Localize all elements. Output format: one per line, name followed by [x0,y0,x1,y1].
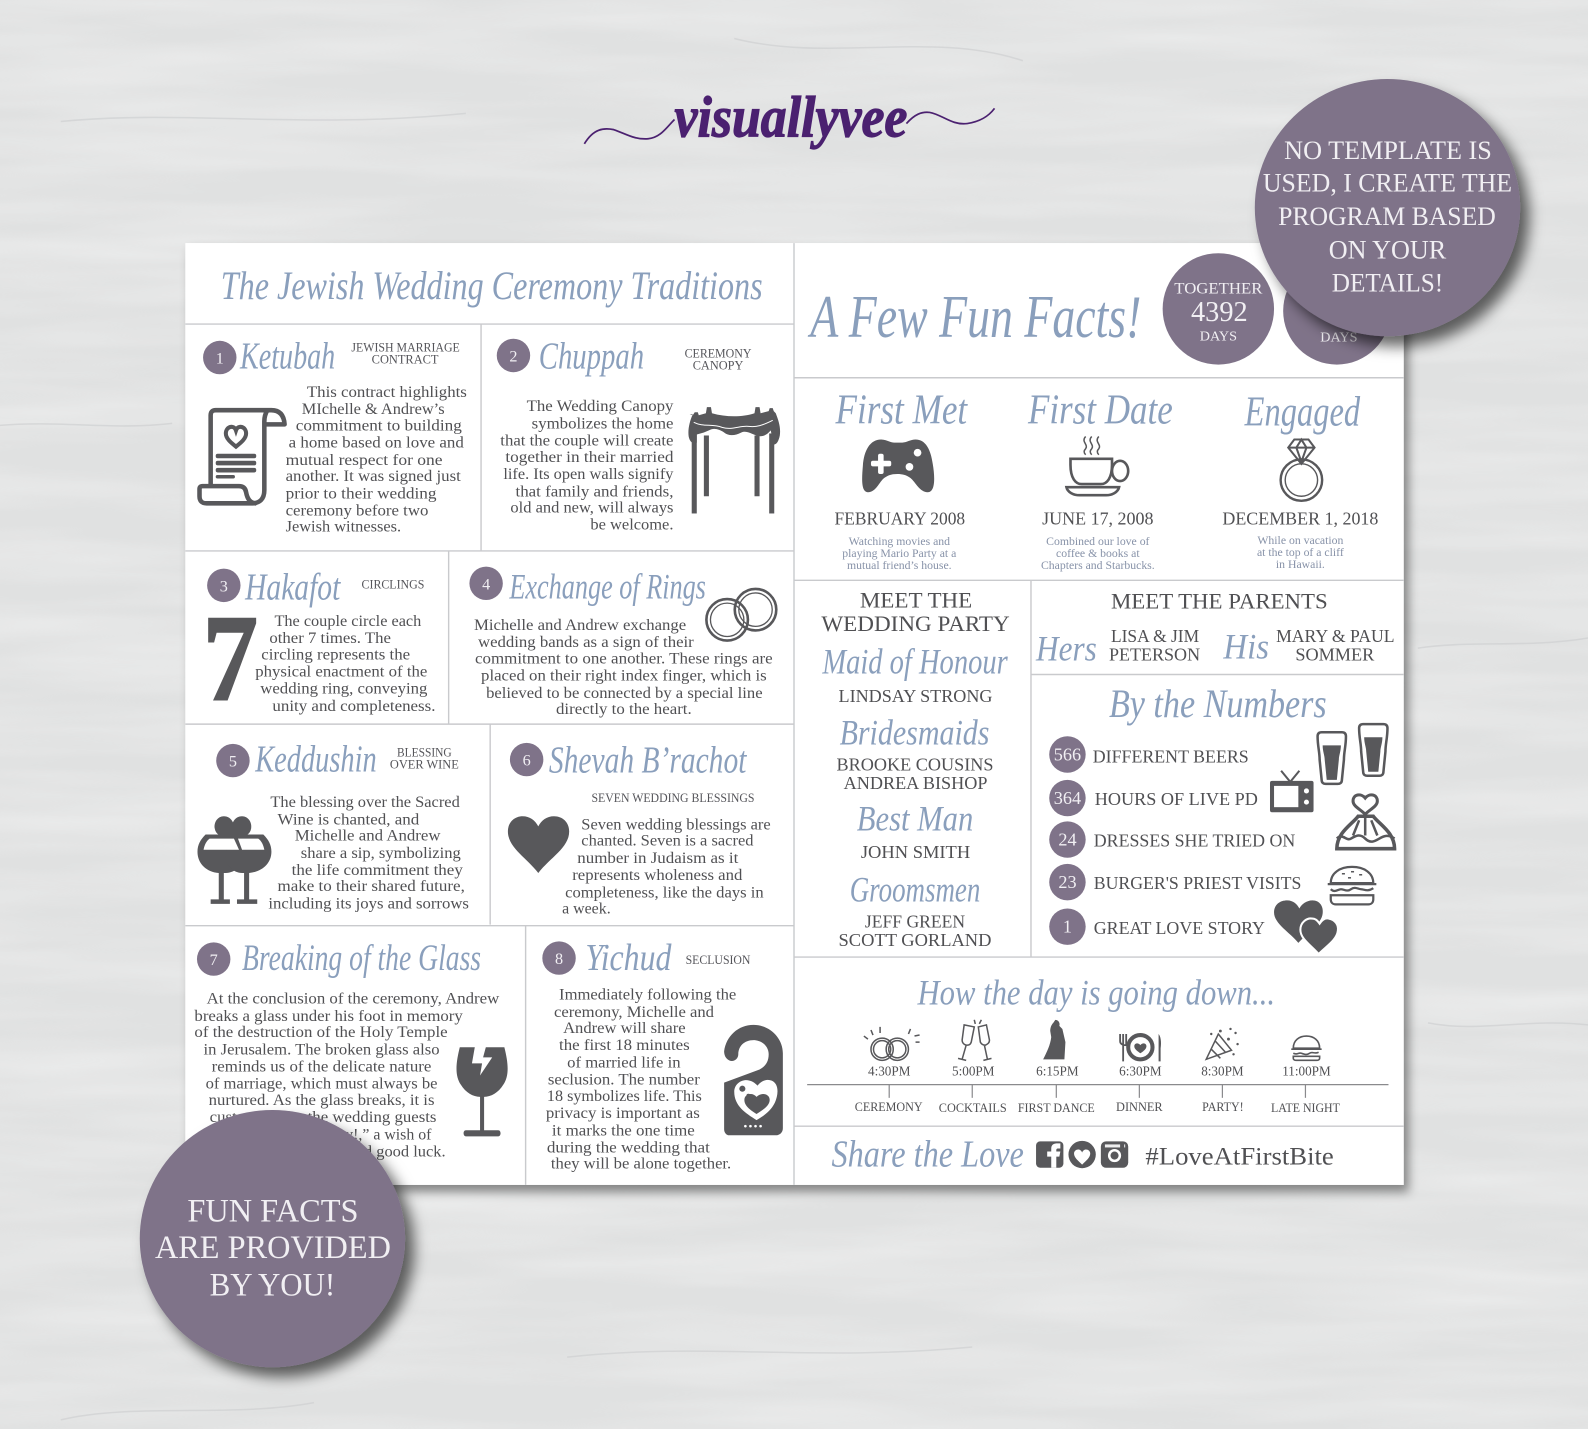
row: 23 burgers: 23 [1058,872,1077,892]
heading: MEET THE PARENTS [1111,589,1328,614]
hers: PETERSON [1109,644,1200,664]
body text: the life commitment they [292,862,463,879]
his: His [1223,626,1269,666]
engaged column: at the top of a cliff [1257,546,1344,559]
body text: seclusion. The number [548,1072,701,1089]
body text: Seven wedding blessings are [581,816,771,833]
body text: This contract highlights [307,384,467,401]
body text: it marks the one time [552,1122,695,1139]
callout: fun facts are provided by you: FUN FACTS [187,1193,359,1229]
bridesmaids: BROOKE COUSINS [837,755,994,775]
icon: facebook [1036,1141,1063,1168]
panel: share the love [831,1134,1334,1176]
subtitle: JEWISH MARRIAGE [351,340,460,354]
body text: chanted. Seven is a sacred [581,833,754,850]
his [1223,626,1395,666]
body text: customary for the wedding guests [210,1109,436,1126]
timeline labels: COCKTAILS [939,1101,1007,1115]
row: 23 burgers: BURGER'S PRIEST VISITS [1094,873,1301,893]
icon: coffee cup [1066,436,1128,495]
callout: no template is used [1255,79,1520,336]
icon: bride and groom silhouette [1043,1020,1065,1059]
first date column: coffee & books at [1056,547,1140,560]
second days badge [1283,257,1391,365]
his: SOMMER [1295,644,1374,664]
timeline times: 6:15PM [1036,1064,1079,1079]
days together badge: DAYS [1200,328,1237,344]
body text: together in their married [505,449,674,466]
heading: WEDDING PARTY [821,611,1010,636]
body text: make to their shared future, [277,878,465,895]
logo: visuallyvee: visuallyvee [674,85,907,150]
his: MARY & PAUL [1276,626,1395,646]
subtitle [685,347,751,373]
first date column: Combined our love of [1046,535,1150,548]
white program card [185,243,1404,1185]
row: 1 love story [1049,908,1265,945]
timeline labels: FIRST DANCE [1018,1101,1095,1115]
callout: no template is used: PROGRAM BASED [1278,202,1496,231]
body text [194,991,500,1161]
Yichud heading: Yichud [585,937,672,979]
body text: 18 symbolizes life. This [547,1088,702,1105]
first date column: JUNE 17, 2008 [1042,509,1154,529]
panel: 2 Chuppah [497,336,780,534]
body text: during the wedding that [547,1140,711,1157]
number badge 7: 7 [210,951,218,969]
number badge 3: 3 [220,577,228,595]
row: 566 beers: DIFFERENT BEERS [1093,747,1249,767]
row: 1 love story: GREAT LOVE STORY [1094,918,1265,938]
subtitle: SECLUSION [686,953,750,967]
body text: Jewish witnesses. [286,519,401,536]
body text: physical enactment of the [255,664,427,681]
panel: by the numbers [1049,681,1395,954]
row: 24 dresses: DRESSES SHE TRIED ON [1094,831,1296,851]
Keddushin heading: Keddushin [254,739,377,781]
number badge 2 [497,339,530,372]
callout: fun facts are provided by you [140,1110,405,1367]
icon: wine glasses and heart [197,816,271,904]
body text: of the destruction of the Holy Temple [194,1024,448,1041]
callout: fun facts are provided by you: ARE PROVIDED [155,1230,391,1266]
callout: no template is used: ON YOUR [1329,235,1447,264]
icon: party popper [1206,1028,1239,1059]
panel: milestones [835,386,1379,572]
body text: to shout “Mazel Tov!,” a wish of [224,1126,432,1143]
icon: champagne flutes [958,1020,991,1060]
body text: in Jerusalem. The broken glass also [204,1041,440,1058]
bridesmaids: ANDREA BISHOP [844,773,988,793]
body text: a home based on love and [289,435,464,452]
subtitle: OVER WINE [390,758,459,772]
maid of honour [822,641,1008,706]
panel: meet the wedding party [821,588,1010,950]
timeline times: 8:30PM [1201,1064,1244,1079]
number badge 8 [542,941,576,975]
timeline labels: PARTY! [1202,1100,1244,1114]
body text: unity and completeness. [272,698,435,715]
body text: The blessing over the Sacred [270,794,460,811]
body text: number in Judaism as it [577,850,739,867]
panel: 1 Ketubah [200,336,467,536]
panel: 3 Hakafot [203,567,435,727]
subtitle [351,340,460,367]
body text: commitment to one another. These rings are [475,650,773,667]
panel: meet the parents [1035,589,1395,668]
icon: heart [508,816,569,873]
row: 364 live pd: 364 [1054,788,1081,808]
body text [268,794,469,912]
body text: MIchelle & Andrew’s [302,401,445,418]
second days badge: DAYS [1320,329,1357,345]
callout: no template is used: NO TEMPLATE IS [1284,136,1492,165]
body text [562,816,771,918]
body text: privacy is important as [546,1105,700,1122]
body text: circling represents the [261,646,410,663]
Shevah B'rachot heading: Shevah B’rachot [549,740,747,782]
body text: of marriage, which must always be [206,1076,438,1093]
body text: Immediately following the [559,987,736,1004]
body text: directly to the heart. [556,701,692,718]
icon: diamond ring [1281,440,1322,501]
row: 364 live pd: HOURS OF LIVE PD [1095,789,1258,809]
body text: other 7 times. The [269,630,391,647]
days together badge: TOGETHER [1174,280,1263,298]
subtitle: SEVEN WEDDING BLESSINGS [591,791,755,805]
number badge 8: 8 [555,950,563,968]
groomsmen: Groomsmen [850,869,980,909]
body text: old and new, will always [510,499,673,516]
body text: Michelle and Andrew exchange [474,617,686,634]
first date column: Chapters and Starbucks. [1041,559,1155,572]
row: 364 live pd [1049,780,1258,816]
first met column [835,386,968,572]
row: 24 dresses: 24 [1058,830,1077,850]
icon: wedding dress [1337,795,1395,849]
body text: the first 18 minutes [559,1037,690,1054]
first met column: playing Mario Party at a [842,547,957,560]
bridesmaids [837,712,994,793]
body text: mutual respect for one [286,452,443,469]
days together badge [1163,253,1274,365]
icon: chuppah canopy [688,407,780,513]
callout: no template is used: USED, I CREATE THE [1263,168,1512,197]
body text: life. Its open walls signify [503,466,674,483]
engaged column: While on vacation [1257,534,1344,547]
icon: instagram [1101,1141,1128,1168]
hers: LISA & JIM [1111,626,1199,646]
days together badge: 4392 [1191,297,1248,328]
body text: At the conclusion of the ceremony, Andrew [207,991,500,1008]
icon: beer glasses [1318,724,1387,784]
body text: including its joys and sorrows [268,895,469,912]
row: 566 beers [1049,736,1249,773]
best man: Best Man [857,798,973,838]
body text: another. It was signed just [286,468,461,485]
Ketubah heading: Ketubah [239,336,335,378]
heading [821,588,1010,636]
body text: of married life in [567,1054,681,1071]
icon: burger [1328,867,1376,904]
engaged column: DECEMBER 1, 2018 [1222,509,1379,529]
body text: symbolizes the home [532,415,673,432]
icon: scroll [200,410,285,503]
panel: fun facts header [807,253,1391,365]
body text: nurtured. As the glass breaks, it is [209,1092,434,1109]
body text: placed on their right index finger, which is [481,668,767,685]
heading: A Few Fun Facts!: A Few Fun Facts! [807,284,1141,351]
body text: that the couple will create [500,433,673,450]
first date column [1027,386,1173,572]
body text: breaks a glass under his foot in memory [194,1008,463,1025]
timeline labels: DINNER [1116,1100,1164,1114]
number badge 6 [510,743,543,776]
body text: believed to be connected by a special line [486,685,763,702]
body text: share a sip, symbolizing [301,845,461,862]
maid of honour: Maid of Honour [822,641,1008,681]
icon: television [1270,771,1314,812]
logo: visuallyvee [584,85,995,150]
timeline labels [855,1100,1340,1115]
engaged column: in Hawaii. [1276,558,1325,571]
best man [857,798,973,862]
timeline labels: LATE NIGHT [1271,1101,1340,1115]
body text [286,384,467,536]
timeline times: 6:30PM [1119,1064,1162,1079]
body text: The couple circle each [274,613,421,630]
row: 566 beers: 566 [1054,745,1081,765]
subtitle: CANOPY [693,359,743,373]
icon: large numeral 7: 7 [203,590,258,727]
body text: commitment to building [296,417,462,434]
body text [474,617,773,718]
heading: How the day is going down... [917,973,1275,1013]
callout: fun facts are provided by you: BY YOU! [210,1267,335,1303]
first date column: First Date [1027,386,1173,433]
panel: 6 Shevah B'rachot [508,740,771,918]
Hakafot heading: Hakafot [244,567,341,609]
heading: MEET THE [860,588,972,613]
number badge 3 [207,569,241,602]
subtitle: BLESSING [397,746,452,760]
number badge 7 [197,942,230,976]
body text: wedding ring, conveying [260,681,427,698]
panel: how the day is going down [807,973,1388,1115]
panel: 8 Yichud [542,937,783,1173]
heading: By the Numbers [1109,681,1327,726]
best man: JOHN SMITH [861,842,970,862]
icon: game controller [862,440,934,492]
maid of honour: LINDSAY STRONG [839,686,993,706]
row: 24 dresses [1049,821,1296,858]
number badge 4: 4 [482,575,490,593]
subtitle [390,746,459,772]
body text: ceremony before two [286,502,428,519]
first met column: mutual friend’s house. [847,559,952,572]
body text: The Wedding Canopy [527,398,674,415]
body text: Andrew will share [563,1020,686,1037]
body text: ceremony, Michelle and [554,1004,714,1021]
body text: prior to their wedding [286,485,437,502]
body text [546,987,736,1173]
icon: heart circle [1068,1141,1096,1168]
engaged column [1222,388,1379,571]
Chuppah heading: Chuppah [539,336,644,378]
heading: Share the Love [831,1134,1024,1176]
timeline labels: CEREMONY [855,1100,923,1114]
icon: small burger [1291,1036,1322,1060]
groomsmen [839,869,992,950]
icon: broken wine glass [456,1046,508,1136]
icon: door hanger [724,1025,783,1135]
engaged column: Engaged [1244,388,1361,435]
number badge 5: 5 [229,753,237,771]
Exchange of Rings heading: Exchange of Rings [509,567,706,607]
first met column: FEBRUARY 2008 [835,509,965,529]
subtitle: CONTRACT [372,353,439,367]
heading: The Jewish Wedding Ceremony Traditions: The Jewish Wedding Ceremony Traditions [221,263,763,308]
number badge 4 [469,567,503,600]
first met column: First Met [835,386,968,433]
bridesmaids: Bridesmaids [840,712,989,752]
row: 23 burgers [1049,864,1301,900]
hers [1035,626,1200,668]
hashtag: #LoveAtFirstBite [1145,1142,1334,1171]
body text: Wine is chanted, and [277,811,419,828]
timeline times: 11:00PM [1282,1064,1331,1079]
icon: interlocked rings [706,589,776,641]
body text [500,398,674,534]
number badge 1: 1 [216,350,224,368]
number badge 6: 6 [523,752,531,770]
icon: plate and cutlery [1120,1034,1161,1061]
number badge 5 [216,744,250,777]
icon: rings [864,1027,920,1060]
timeline times: 4:30PM [868,1064,911,1079]
panel: 7 Breaking of the Glass [194,938,508,1161]
body text: completeness, like the days in [565,884,764,901]
first met column: Watching movies and [849,535,950,548]
number badge 1 [203,341,236,374]
body text: they will be alone together. [551,1156,731,1173]
body text: reminds us of the delicate nature [212,1058,431,1075]
body text: represents wholeness and [572,867,742,884]
hers: Hers [1035,628,1097,668]
icon: two hearts [1274,900,1338,954]
Breaking of the Glass heading: Breaking of the Glass [242,938,481,979]
body text: wedding bands as a sign of their [478,634,695,651]
callout: no template is used: DETAILS! [1332,269,1443,298]
panel divider grid [185,243,1404,1185]
body text: Michelle and Andrew [295,828,441,845]
body text [255,613,435,715]
body text: be welcome. [590,517,673,534]
row: 1 love story: 1 [1063,917,1072,937]
body text: a week. [562,901,611,918]
groomsmen: SCOTT GORLAND [839,930,992,950]
body text: that family and friends, [515,483,673,500]
timeline times [868,1064,1331,1079]
timeline axis [807,1085,1388,1098]
timeline times: 5:00PM [952,1064,995,1079]
panel: 5 Keddushin [197,739,469,912]
subtitle: CEREMONY [685,347,751,361]
body text: congratulations and good luck. [243,1144,446,1161]
groomsmen: JEFF GREEN [865,912,965,932]
panel: 4 Exchange of Rings [469,567,776,718]
number badge 2: 2 [509,348,518,366]
subtitle: CIRCLINGS [362,577,424,591]
